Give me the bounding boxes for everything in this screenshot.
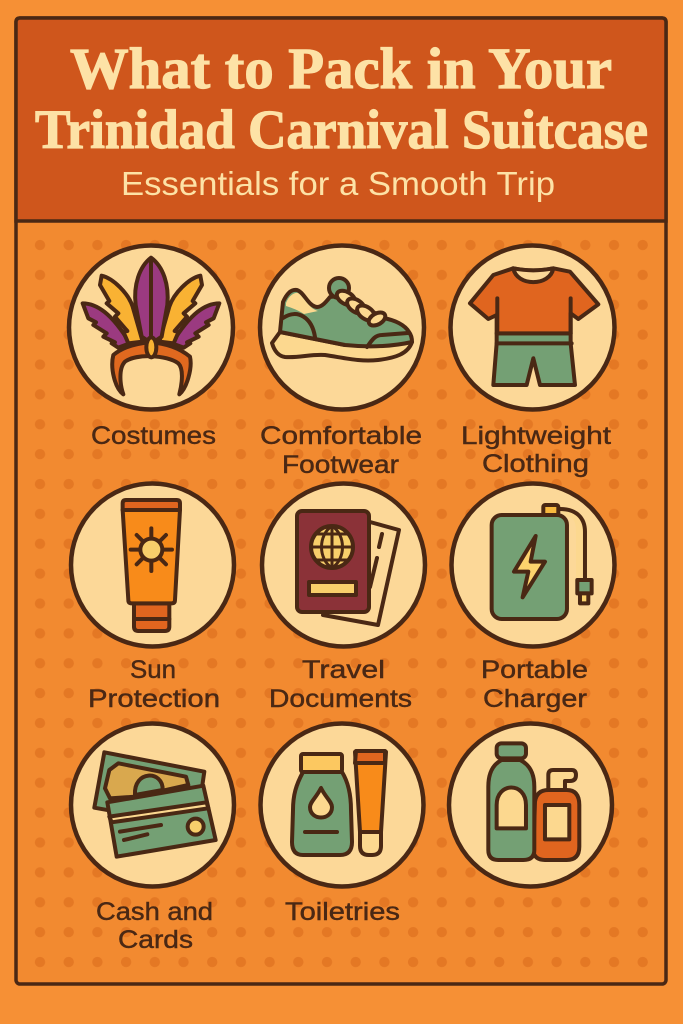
label: Documents xyxy=(269,685,412,713)
icon: shampoo bottle and pump xyxy=(488,743,579,860)
label xyxy=(88,656,220,713)
label: Footwear xyxy=(282,451,399,479)
item: costumes xyxy=(69,246,233,450)
item: travel documents xyxy=(262,484,425,713)
icon: power bank xyxy=(492,505,592,619)
item: portable charger xyxy=(452,484,614,713)
item: comfortable footwear xyxy=(260,246,424,479)
label: Clothing xyxy=(482,450,589,478)
item: toiletries xyxy=(260,724,424,926)
label: Portable xyxy=(481,656,588,684)
title: Trinidad Carnival Suitcase xyxy=(35,99,648,160)
item: lightweight clothing xyxy=(450,246,614,478)
item: bottles (unlabelled) xyxy=(449,724,612,886)
header banner xyxy=(16,18,666,221)
item: cash and cards xyxy=(71,724,234,954)
label xyxy=(461,422,611,478)
label xyxy=(269,656,412,713)
icon: cash and credit card xyxy=(94,752,216,857)
icon: lotion bottle and tube xyxy=(292,751,386,855)
icon: t-shirt and shorts xyxy=(470,268,598,385)
label: Protection xyxy=(88,685,220,713)
label: Cash and xyxy=(96,898,213,926)
title: What to Pack in Your xyxy=(70,36,612,101)
label: Comfortable xyxy=(260,422,422,450)
item: sun protection xyxy=(71,484,234,713)
subtitle: Essentials for a Smooth Trip xyxy=(121,165,555,202)
label xyxy=(481,656,588,713)
icon: sneaker xyxy=(272,278,412,361)
label: Toiletries xyxy=(285,898,400,926)
icon: sunscreen tube xyxy=(123,500,180,631)
label: Charger xyxy=(483,685,587,713)
label: Cards xyxy=(118,926,193,954)
label: Travel xyxy=(302,656,385,684)
label: Sun xyxy=(130,656,176,684)
icon: feather headdress xyxy=(83,258,219,394)
title xyxy=(35,36,648,160)
label xyxy=(96,898,213,954)
icon: passport and ticket xyxy=(297,511,399,625)
label: Lightweight xyxy=(461,422,611,450)
label: Costumes xyxy=(91,422,216,450)
label xyxy=(260,422,422,479)
